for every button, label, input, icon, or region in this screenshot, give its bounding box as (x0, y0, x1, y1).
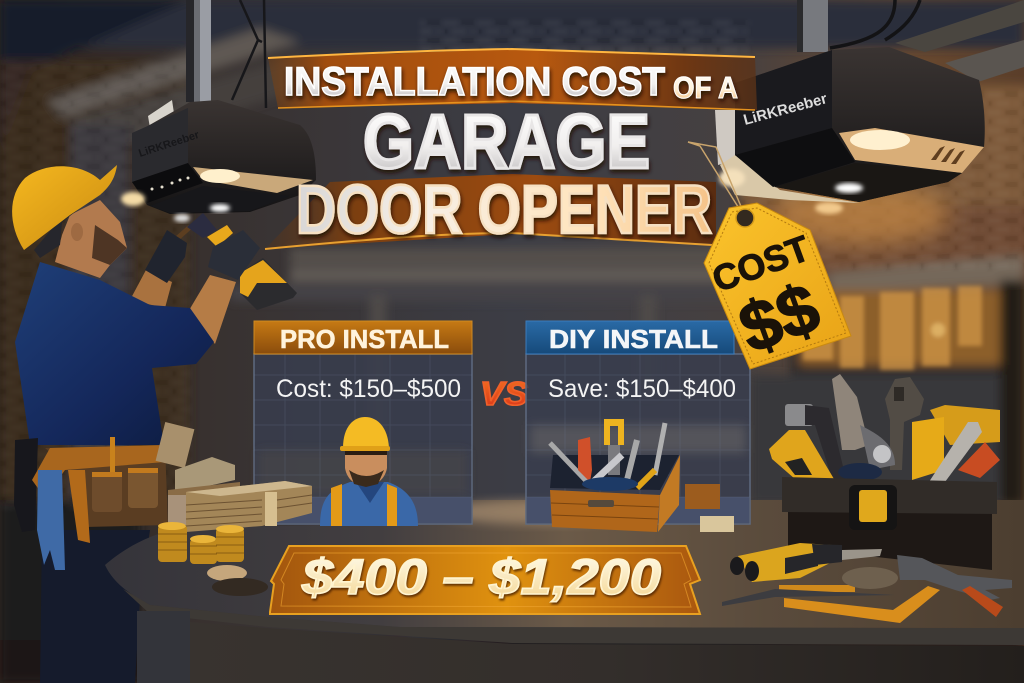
large box body (788, 510, 992, 570)
price tag (688, 142, 851, 369)
garage door opener left: LiRKReeber (137, 129, 201, 160)
cash stacks and coins (158, 457, 312, 596)
garage door opener right (715, 0, 985, 214)
price text: $400 – $1,200 (301, 549, 661, 605)
panel: pro install (254, 321, 472, 524)
band: bottom line (265, 174, 716, 249)
worker legs (40, 530, 150, 683)
wrench (897, 555, 1012, 600)
housing (132, 100, 316, 214)
mounting rail (186, 0, 211, 102)
tag dollars: $$ (729, 268, 829, 368)
coin stacks (158, 525, 244, 564)
workbench table (105, 500, 1024, 683)
large toolbox right (769, 374, 1000, 570)
garage door opener right: LiRKReeber (742, 90, 829, 129)
housing (735, 47, 985, 202)
title: OF A (673, 70, 738, 105)
tag label: COST (707, 227, 815, 300)
tools in large box (769, 374, 1000, 486)
band: top line (268, 49, 757, 110)
worker shirt (15, 262, 214, 445)
panel: diy install (526, 321, 750, 524)
small toolbox in diy panel (550, 419, 734, 532)
title line 3: DOOR OPENER (296, 171, 712, 248)
tag string (688, 142, 745, 218)
yellow driver (738, 543, 832, 582)
cordless drill (172, 213, 297, 310)
worker hard hat (12, 165, 117, 250)
mounting rail (797, 0, 828, 52)
worker gloves (145, 230, 187, 283)
garage door opener left (121, 0, 316, 222)
cash stacks (175, 457, 235, 490)
gear scraps (842, 567, 898, 589)
tool belt (14, 422, 194, 570)
total price banner (270, 546, 700, 614)
diy panel body (526, 354, 750, 524)
worker (12, 165, 297, 570)
title line 1: INSTALLATION COST (284, 60, 665, 104)
keys and rubble (207, 565, 247, 581)
title bands (265, 49, 757, 249)
title line 2: GARAGE (363, 99, 650, 185)
tag body (704, 203, 851, 369)
small box interior (550, 455, 679, 490)
pliers and square (779, 585, 855, 592)
title (284, 60, 738, 248)
diy header text: DIY INSTALL (549, 324, 718, 354)
pro header text: PRO INSTALL (280, 324, 449, 354)
hand tools on bench (722, 543, 1012, 623)
pro header (254, 321, 472, 354)
worker arms (130, 270, 172, 308)
worker head (55, 200, 127, 278)
vs label: VS (480, 375, 528, 412)
pro cost text: Cost: $150–$500 (276, 375, 461, 403)
diy header (526, 321, 734, 354)
icon: worker avatar (320, 417, 418, 526)
tools in small box (550, 419, 665, 491)
small box body (550, 490, 660, 532)
ceiling beam top right (895, 0, 1024, 82)
diy save text: Save: $150–$400 (548, 375, 736, 403)
pro panel body (254, 354, 472, 524)
